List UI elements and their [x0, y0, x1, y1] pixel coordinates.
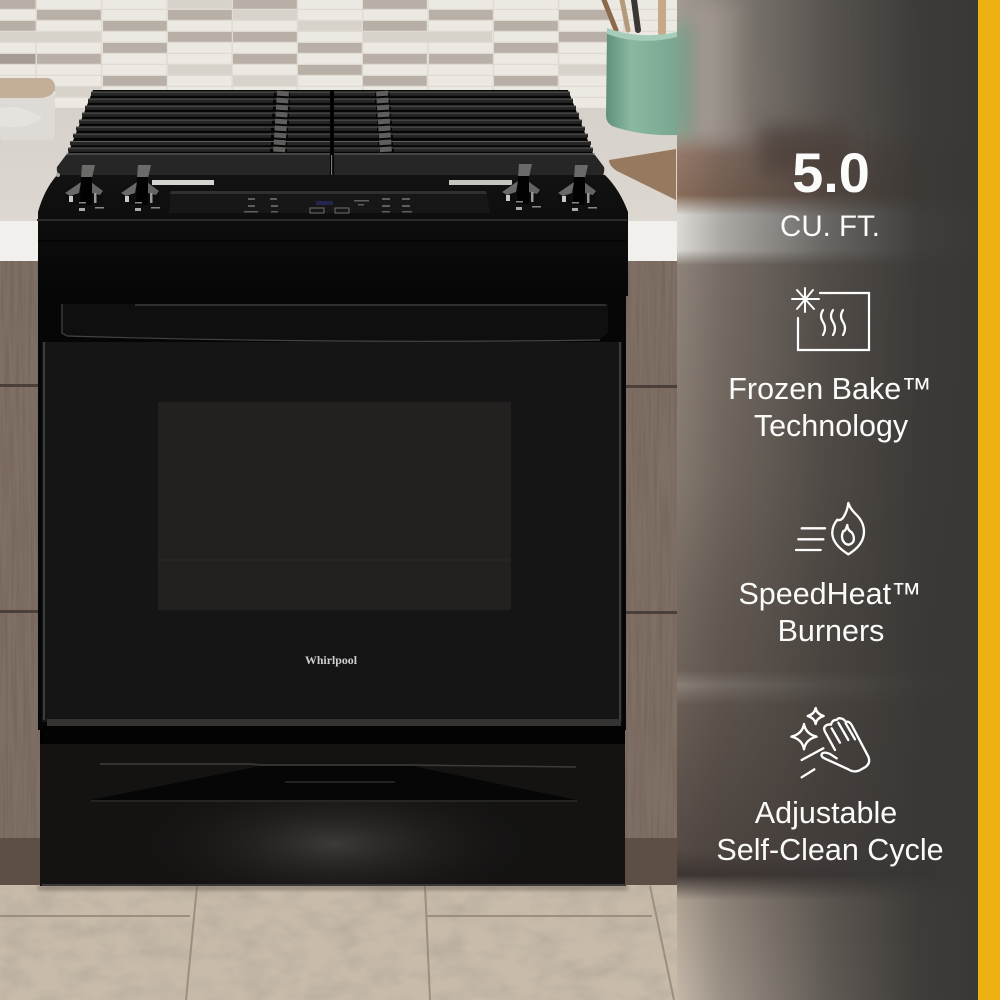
text: adjustable self-clean cycle: Adjustable: [755, 796, 897, 830]
knob 2: [121, 165, 160, 211]
green utensil crock: [604, 0, 677, 135]
left grate: [68, 92, 330, 150]
panel: blurred features sidebar: [665, 0, 978, 1000]
blurred crock colour: [677, 19, 698, 140]
door handle: [62, 304, 608, 341]
text: frozen bake technology: Frozen Bake™: [728, 372, 932, 406]
logo: Whirlpool: [305, 655, 357, 667]
cutting board: [609, 149, 676, 200]
knob 1: [65, 165, 104, 211]
range: oven door: [38, 296, 626, 730]
cabinets: [0, 261, 680, 886]
capacity stat: 5.0: [792, 141, 870, 204]
text: frozen bake technology: [728, 372, 932, 443]
knob 3: [502, 164, 541, 210]
text: speedheat burners: [738, 577, 922, 648]
range: cooktop grates: [56, 90, 605, 180]
text: adjustable self-clean cycle: Self-Clean Cycle: [716, 833, 944, 867]
burner supports: [279, 91, 386, 154]
floor tiles: [0, 885, 680, 1000]
text: frozen bake technology: Technology: [754, 409, 909, 443]
yellow accent bar: [978, 0, 1000, 1000]
range: storage drawer: [40, 719, 626, 886]
grate front bands: [57, 155, 330, 177]
icon: frozen bake: [792, 288, 869, 350]
right grate: [334, 92, 593, 150]
text: speedheat burners: Burners: [778, 614, 884, 648]
jar with marble body and wood lid: [0, 78, 55, 140]
oven window: [158, 402, 511, 610]
countertop: [0, 108, 680, 261]
capacity stat: CU. FT.: [780, 210, 880, 243]
icon: self-clean hand and sparkles: [791, 708, 869, 777]
range: control panel and body: [37, 173, 628, 296]
text: adjustable self-clean cycle: [716, 796, 944, 867]
text: speedheat burners: SpeedHeat™: [738, 577, 922, 611]
knob 4: [558, 165, 597, 211]
blurred board shadow: [760, 125, 850, 175]
background: kitchen wall with tiles: [0, 0, 680, 110]
capacity stat: [780, 141, 880, 243]
icon: speedheat flame: [796, 503, 864, 554]
blurred pale streak: [700, 0, 740, 140]
